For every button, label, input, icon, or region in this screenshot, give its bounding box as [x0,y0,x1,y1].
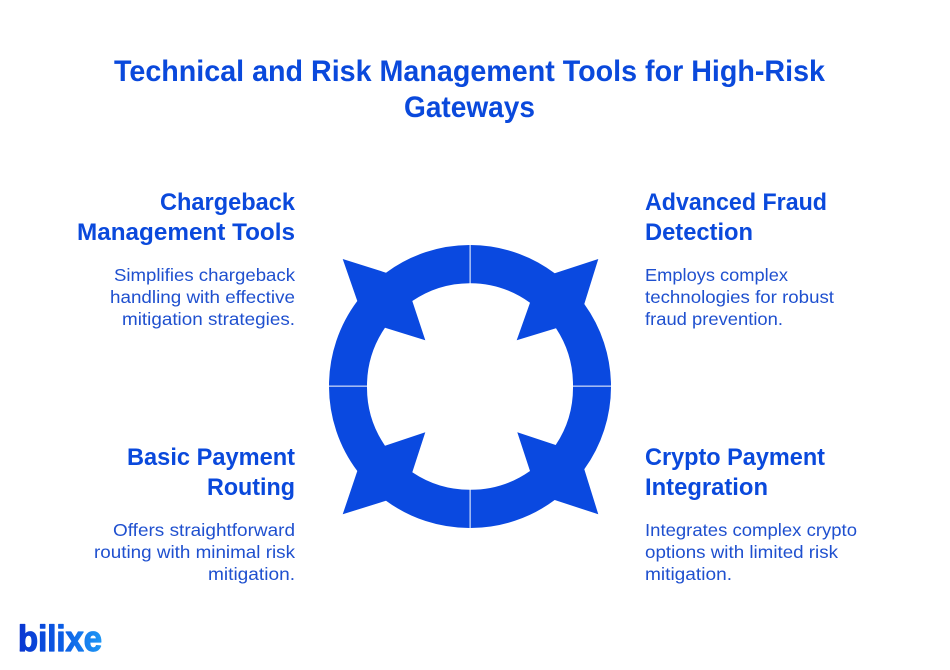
diagram: four-part ring with inward and outward arrows [329,245,611,528]
text: payment routing description: mitigation. [208,564,295,584]
text: payment routing description: routing with minimal risk [94,542,295,562]
panel: crypto payment integration [645,444,857,584]
ring segment: top left [329,245,470,386]
heading: crypto payment integration [645,444,825,501]
ring segment: bottom right [471,387,611,528]
heading: advanced fraud detection: Advanced Fraud [645,189,827,216]
ring segment: top right [471,245,611,386]
panel: chargeback management tools [77,189,296,329]
heading: crypto payment integration: Crypto Payment [645,444,825,471]
title: Gateways [404,91,535,124]
logo: bilixe: bilixe [18,618,102,659]
text: fraud detection description: Employs complex [645,265,788,285]
text: chargeback description: Simplifies chargeback [114,265,295,285]
heading: chargeback management tools: Chargeback [160,189,296,216]
text: crypto integration description: Integrates complex crypto [645,520,857,540]
heading: chargeback management tools [77,189,296,246]
heading: basic payment routing [127,444,295,501]
text: fraud detection description: technologies for robust [645,287,834,307]
heading: crypto payment integration: Integration [645,474,768,501]
text: chargeback description: handling with effective [110,287,295,307]
text: payment routing description [94,520,295,584]
heading: chargeback management tools: Management Tools [77,219,295,246]
text: fraud detection description [645,265,834,329]
title: Technical and Risk Management Tools for High-Risk [114,55,825,88]
text: crypto integration description: mitigation. [645,564,732,584]
title [114,55,825,124]
heading: advanced fraud detection: Detection [645,219,753,246]
text: fraud detection description: fraud prevention. [645,309,783,329]
heading: advanced fraud detection [645,189,827,246]
text: chargeback description: mitigation strategies. [122,309,295,329]
panel: advanced fraud detection [645,189,834,329]
text: chargeback description [110,265,295,329]
text: payment routing description: Offers straightforward [113,520,295,540]
heading: basic payment routing: Basic Payment [127,444,295,471]
heading: basic payment routing: Routing [207,474,295,501]
ring segment: bottom left [329,387,470,528]
panel: basic payment routing [94,444,295,584]
text: crypto integration description: options with limited risk [645,542,838,562]
text: crypto integration description [645,520,857,584]
